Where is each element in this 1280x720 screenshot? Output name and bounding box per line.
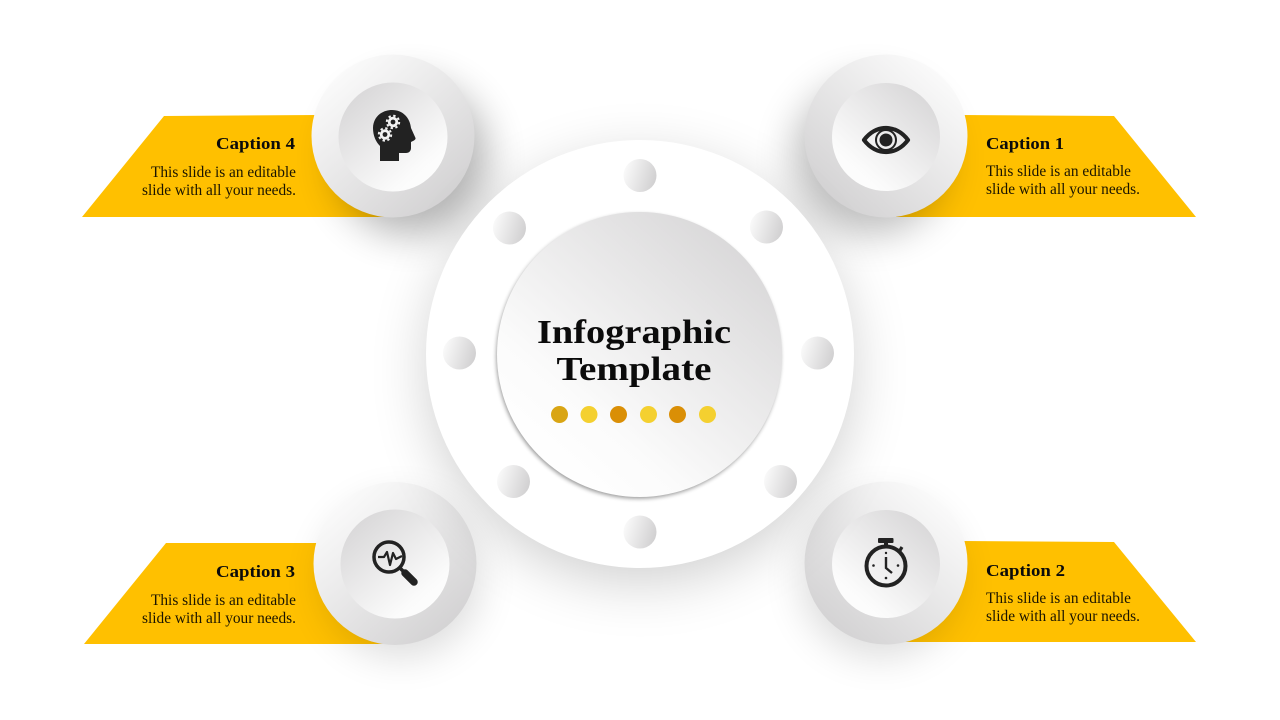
heading: caption 1: Caption 1: [986, 134, 1064, 153]
ring holes: [443, 159, 834, 548]
title: Template: [556, 351, 712, 388]
icon: head with gears: [373, 110, 416, 161]
banner: caption 2: [896, 541, 1196, 642]
node: caption 2 badge: [802, 482, 968, 656]
icon: eye: [864, 128, 908, 152]
decorative dots: [551, 406, 716, 423]
panel: caption 4: [82, 115, 385, 217]
text: caption 4 description: slide with all your needs.: [142, 182, 296, 199]
title: [537, 314, 731, 388]
panel: caption 2: [896, 541, 1196, 642]
heading: caption 3: Caption 3: [216, 562, 295, 581]
text: caption 2 description: slide with all your needs.: [986, 608, 1140, 625]
icon: magnifier with pulse: [374, 542, 414, 582]
icon: stopwatch: [866, 538, 906, 586]
text: caption 3 description: [142, 592, 296, 627]
title: Infographic: [537, 314, 731, 351]
banner: caption 4: [82, 115, 385, 217]
text: caption 3 description: This slide is an editable: [151, 592, 296, 609]
node: caption 4 badge: [312, 54, 487, 234]
text: caption 4 description: [142, 164, 296, 199]
text: caption 4 description: This slide is an editable: [151, 164, 296, 181]
text: caption 1 description: This slide is an editable: [986, 163, 1131, 180]
panel: caption 3: [84, 543, 387, 644]
node: caption 3 badge: [314, 482, 479, 656]
heading: caption 2: Caption 2: [986, 561, 1065, 580]
text: caption 3 description: slide with all your needs.: [142, 610, 296, 627]
central ring: [426, 140, 854, 580]
text: caption 2 description: [986, 590, 1140, 625]
center disc: [496, 212, 782, 498]
text: caption 2 description: This slide is an editable: [986, 590, 1131, 607]
node: caption 1 badge: [794, 54, 968, 234]
text: caption 1 description: slide with all your needs.: [986, 181, 1140, 198]
banner: caption 3: [84, 543, 387, 644]
panel: caption 1: [896, 115, 1196, 217]
heading: caption 4: Caption 4: [216, 134, 295, 153]
banner: caption 1: [896, 115, 1196, 217]
text: caption 1 description: [986, 163, 1140, 198]
